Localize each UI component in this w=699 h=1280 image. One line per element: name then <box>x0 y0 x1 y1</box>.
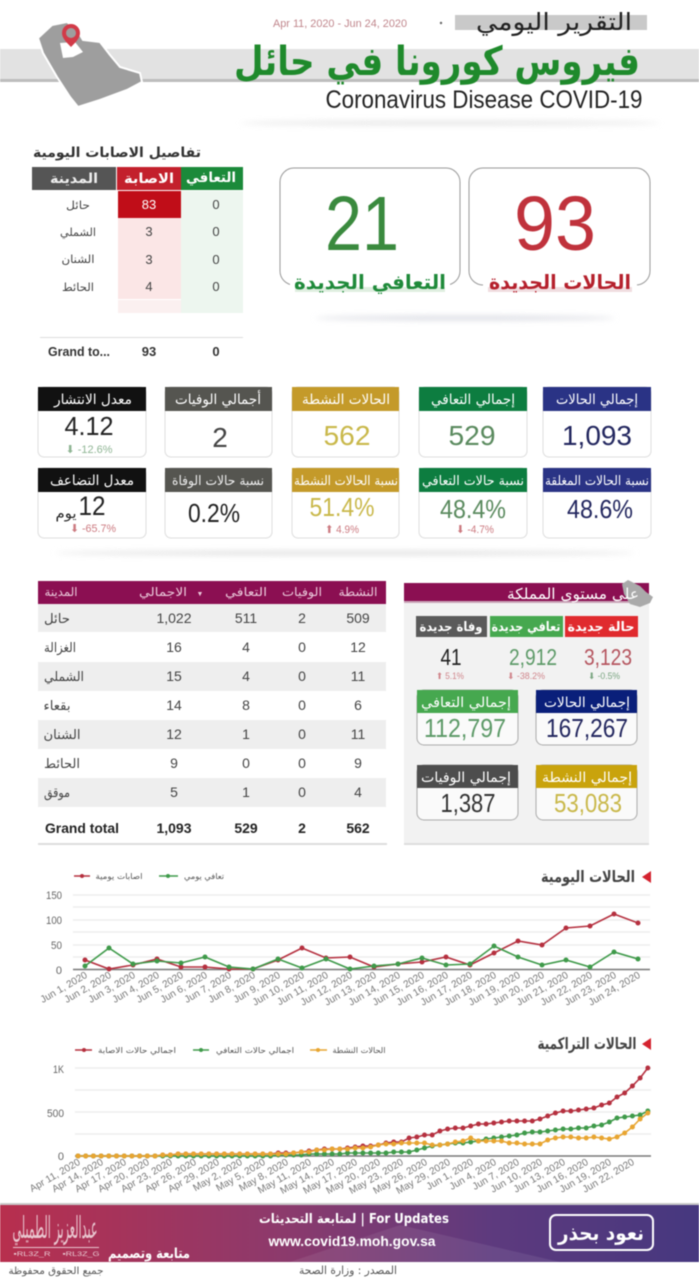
designer signature: متابعة وتصميم <box>108 1246 190 1262</box>
daily chart x axis: Jun 5, 2020 <box>135 970 186 1006</box>
update text: www.covid19.moh.gov.sa <box>268 1233 436 1249</box>
table body: 0 <box>212 197 220 212</box>
panel header: على مستوى المملكة <box>507 585 639 603</box>
daily chart title: الحالات اليومية <box>541 867 635 886</box>
city table header: المدينة <box>44 585 78 599</box>
daily chart x axis: Jun 20, 2020 <box>491 970 547 1009</box>
stat card: spread rate: معدل الانتشار <box>53 392 132 408</box>
table header: التعافي <box>186 170 236 186</box>
stat card: closed cases rate: نسبة الحالات المغلقة <box>545 474 649 489</box>
total active card <box>536 765 637 820</box>
main title: فيروس كورونا في حائل <box>234 39 640 85</box>
city table rows: 4 <box>242 668 250 684</box>
logo: slogan <box>550 1215 653 1250</box>
table body: 83 <box>142 197 156 212</box>
report heading: التقرير اليومي <box>476 8 632 36</box>
stat card: recovery rate <box>419 468 527 538</box>
stat card: closed cases rate <box>543 468 651 538</box>
daily chart x axis <box>39 970 643 1009</box>
new case values <box>436 644 632 681</box>
daily chart x axis: Jun 19, 2020 <box>467 970 523 1009</box>
daily chart legend: تعافي يومي <box>184 872 224 881</box>
table totals: 93 <box>142 344 156 359</box>
new case chips <box>416 616 638 637</box>
table body: الحائط <box>62 281 94 294</box>
cumulative cases line <box>78 1068 648 1156</box>
total active card: إجمالي النشطة <box>542 770 632 786</box>
city table rows: 1 <box>242 726 250 742</box>
city table rows: 4 <box>354 784 362 800</box>
city table rows: حائل <box>44 612 70 627</box>
cumulative chart gridlines <box>75 1068 651 1156</box>
total recovered card: إجمالي التعافي <box>421 695 511 711</box>
daily chart gridlines <box>73 895 650 970</box>
daily chart x axis: Jun 7, 2020 <box>183 970 234 1006</box>
daily chart x axis: Jun 15, 2020 <box>371 970 427 1009</box>
city table rows <box>38 604 386 807</box>
daily details table <box>32 145 243 359</box>
cumulative chart legend: اجمالي حالات الاصابة <box>98 1046 176 1055</box>
card: new recoveries <box>280 168 460 295</box>
stat card: total recovered: إجمالي التعافي <box>431 392 515 408</box>
footer source: المصدر : وزارة الصحة <box>299 1264 397 1277</box>
total recovered card <box>417 690 518 745</box>
total cases card <box>536 690 637 745</box>
cumulative chart x axis: Jun 10, 2020 <box>489 1157 545 1196</box>
cumulative chart x axis: Jun 22, 2020 <box>581 1157 637 1196</box>
city table rows: 511 <box>235 610 257 626</box>
daily chart x axis: Jun 2, 2020 <box>63 970 114 1006</box>
stat card: active <box>292 387 399 457</box>
panel: kingdom level <box>404 580 653 845</box>
stat card: active rate: نسبة الحالات النشطة <box>294 474 398 489</box>
city table rows: 9 <box>170 755 178 771</box>
cumulative chart x axis: May 11, 2020 <box>256 1157 314 1197</box>
cumulative chart x axis: Jun 13, 2020 <box>512 1157 568 1196</box>
cumulative chart x axis: Jun 16, 2020 <box>535 1157 591 1196</box>
table body: الشنان <box>62 253 94 266</box>
city table header: التعافي <box>225 585 267 599</box>
daily chart x axis: Jun 3, 2020 <box>87 970 138 1006</box>
daily chart x axis: Jun 17, 2020 <box>419 970 475 1009</box>
stat card: total deaths <box>165 387 272 457</box>
new case chips: تعافي جديدة <box>492 620 560 635</box>
stat card: doubling rate: يوم <box>56 506 77 522</box>
stat card: active: الحالات النشطة <box>302 392 390 408</box>
daily chart x axis: Jun 16, 2020 <box>395 970 451 1009</box>
cumulative chart title: الحالات التراكمية <box>538 1034 636 1053</box>
header shadow <box>240 121 660 125</box>
cumulative chart y axis: 0 <box>58 1151 64 1163</box>
new case values: 3,123 <box>584 644 632 670</box>
cumulative chart x axis: Apr 20, 2020 <box>96 1157 152 1195</box>
footer banner <box>0 1203 699 1262</box>
designer signature <box>12 1211 190 1262</box>
card: new cases <box>469 168 650 294</box>
daily chart legend: اصابات يومية <box>96 872 142 881</box>
city table total: 2 <box>298 820 306 836</box>
city table rows: 0 <box>298 668 306 684</box>
city table rows: الغزالة <box>44 641 76 656</box>
header band <box>0 49 699 82</box>
daily chart x axis: Jun 6, 2020 <box>159 970 210 1006</box>
stat card: total deaths: 2 <box>212 422 228 453</box>
table totals: 0 <box>212 344 220 359</box>
city table rows: 6 <box>354 697 362 713</box>
designer signature: عبدالعزيز الطميلي <box>12 1211 98 1246</box>
stat card: active rate <box>292 468 399 538</box>
logo: slogan: نعود بحذر <box>557 1221 644 1245</box>
stat card: closed cases rate: 48.6% <box>567 494 633 524</box>
cumulative chart legend: اجمالي حالات التعافي <box>216 1046 294 1055</box>
cumulative chart x axis: May 5, 2020 <box>214 1157 268 1194</box>
daily chart y axis: 0 <box>56 965 62 977</box>
daily chart x axis: Jun 14, 2020 <box>347 970 403 1009</box>
city table rows: 8 <box>242 697 250 713</box>
stat card: active rate: 51.4% <box>310 492 374 522</box>
daily chart x axis: Jun 4, 2020 <box>111 970 162 1006</box>
cumulative chart legend <box>75 1046 386 1055</box>
subtitle: Coronavirus Disease COVID-19 <box>326 86 642 114</box>
stat card: active rate: ⬆ 4.9% <box>325 524 359 536</box>
stat card: recovery rate: 48.4% <box>440 494 506 524</box>
stat card: total recovered: 529 <box>448 420 496 451</box>
stat card: total cases: 1,093 <box>562 420 632 451</box>
city table rows: 0 <box>298 784 306 800</box>
total deaths card <box>417 765 518 820</box>
city table total: 1,093 <box>156 820 192 836</box>
city table rows: 12 <box>166 726 182 742</box>
card: new cases: الحالات الجديدة <box>489 270 631 294</box>
date range: Apr 11, 2020 - Jun 24, 2020 <box>273 18 407 30</box>
city table rows: 15 <box>166 668 182 684</box>
daily chart x axis: Jun 18, 2020 <box>443 970 499 1009</box>
update text: For Updates | لمتابعة التحديثات <box>259 1212 449 1227</box>
daily recovery line <box>85 946 638 969</box>
stat card: doubling rate: معدل التضاعف <box>50 473 134 489</box>
stat card: total cases <box>543 387 651 457</box>
city table rows: 9 <box>354 755 362 771</box>
daily chart x axis: Jun 12, 2020 <box>299 970 355 1009</box>
cumulative chart x axis: May 14, 2020 <box>279 1157 337 1197</box>
cumulative chart x axis: Apr 11, 2020 <box>28 1157 83 1195</box>
new case chips: وفاة جديدة <box>420 620 482 635</box>
total active card: 53,083 <box>554 788 622 818</box>
total deaths card: 1,387 <box>440 788 496 818</box>
total deaths card: إجمالي الوفيات <box>421 770 511 786</box>
city table rows: الحائط <box>44 757 80 772</box>
daily chart x axis: Jun 23, 2020 <box>563 970 619 1009</box>
cumulative chart x axis: Jun 1, 2020 <box>425 1157 476 1193</box>
active cases line <box>78 1113 648 1156</box>
city table rows: 0 <box>298 639 306 655</box>
table header: المدينة <box>50 171 98 187</box>
table body: 4 <box>145 279 153 294</box>
cumulative chart x axis <box>28 1157 637 1197</box>
cumulative chart x axis: Apr 29, 2020 <box>166 1157 222 1195</box>
city table rows: 4 <box>242 639 250 655</box>
stat card: doubling rate <box>38 468 146 538</box>
city table total: Grand total <box>45 820 119 836</box>
daily chart x axis: Jun 11, 2020 <box>276 970 331 1008</box>
table totals <box>40 337 243 359</box>
stat card: total recovered <box>419 387 527 457</box>
designer signature: ▪RL3Z_G <box>62 1251 100 1258</box>
chart: cumulative cases <box>28 1034 651 1197</box>
daily chart y axis <box>46 890 62 977</box>
city table total <box>45 820 370 836</box>
table body: 0 <box>212 252 220 267</box>
city table header <box>38 581 386 604</box>
city table rows: 14 <box>166 697 182 713</box>
city table rows: 12 <box>350 639 366 655</box>
stat card: spread rate: ⬇ -12.6% <box>66 444 113 456</box>
stat card: death rate <box>165 468 272 538</box>
cumulative chart x axis: Jun 4, 2020 <box>448 1157 499 1193</box>
daily infections line <box>85 914 638 969</box>
city table header: النشطة <box>338 585 378 599</box>
stat card: spread rate <box>38 387 146 457</box>
stat card: spread rate: 4.12 <box>64 411 114 441</box>
city table total: 529 <box>234 820 258 836</box>
daily chart x axis: Jun 13, 2020 <box>323 970 379 1009</box>
stat card: recovery rate: ⬇ -4.7% <box>456 524 494 536</box>
new case chips: حالة جديدة <box>568 620 634 635</box>
city table rows: بقعاء <box>44 699 70 714</box>
stat card: doubling rate: 12 <box>78 491 106 521</box>
city table rows: 1 <box>242 784 250 800</box>
table header <box>32 167 243 190</box>
cumulative chart x axis: May 8, 2020 <box>237 1157 291 1194</box>
table body: الشملي <box>60 226 96 239</box>
table body: حائل <box>66 199 90 212</box>
city table rows: 0 <box>242 755 250 771</box>
city table <box>38 581 387 845</box>
city table rows: الشملي <box>44 670 84 685</box>
city table header: ▼ <box>197 591 203 598</box>
stat card: total cases: إجمالي الحالات <box>556 392 638 408</box>
table body <box>60 191 243 313</box>
new case values: ⬇ -38.2% <box>507 671 545 681</box>
city table rows: موقق <box>44 786 70 801</box>
table totals: Grand to... <box>48 344 110 359</box>
city table rows: 0 <box>298 726 306 742</box>
city table rows: 0 <box>298 755 306 771</box>
new case values: ⬆ 5.1% <box>436 671 464 681</box>
table body: 3 <box>145 252 153 267</box>
cumulative chart y axis: 1K <box>53 1064 65 1076</box>
new case values: 2,912 <box>509 644 557 670</box>
daily chart y axis: 50 <box>51 940 62 952</box>
stat card: recovery rate: نسبة حالات التعافي <box>422 474 524 489</box>
cumulative recovery line <box>78 1111 648 1156</box>
stat card: total deaths: أجمالي الوفيات <box>175 390 261 408</box>
table body: 0 <box>212 279 220 294</box>
cumulative chart y axis <box>47 1064 65 1163</box>
cumulative chart x axis: Jun 7, 2020 <box>471 1157 522 1193</box>
total recovered card: 112,797 <box>424 713 506 743</box>
new case values: ⬇ -0.5% <box>588 671 620 681</box>
cumulative chart x axis: May 20, 2020 <box>325 1157 383 1197</box>
cumulative chart x axis: Apr 26, 2020 <box>143 1157 199 1195</box>
map: Saudi Arabia with Hail marker <box>38 22 142 107</box>
cumulative chart x axis: Jun 19, 2020 <box>558 1157 614 1196</box>
cumulative chart x axis: May 17, 2020 <box>302 1157 360 1197</box>
update text <box>259 1212 449 1249</box>
city table rows: 16 <box>166 639 182 655</box>
cards shadow <box>315 316 615 320</box>
daily chart y axis: 150 <box>46 890 62 902</box>
stats shadow <box>55 551 635 555</box>
stat card: active: 562 <box>324 420 370 451</box>
city table rows: 0 <box>298 697 306 713</box>
daily chart x axis: Jun 1, 2020 <box>39 970 90 1006</box>
chart: daily cases <box>39 867 651 1009</box>
city table rows: 2 <box>298 610 306 626</box>
card: new recoveries: التعافي الجديدة <box>294 270 446 295</box>
cumulative chart x axis: May 23, 2020 <box>348 1157 406 1197</box>
footer rights: جميع الحقوق محفوظة <box>8 1266 104 1277</box>
daily chart legend <box>74 872 224 881</box>
table title: تفاصيل الاصابات اليومية <box>33 145 201 161</box>
city table header: الاجمالي <box>139 585 187 599</box>
cumulative chart x axis: Apr 23, 2020 <box>119 1157 175 1195</box>
daily chart x axis: Jun 10, 2020 <box>251 970 307 1009</box>
city table rows: 509 <box>346 610 370 626</box>
cumulative chart x axis: Apr 17, 2020 <box>73 1157 129 1195</box>
card: new cases: 93 <box>514 181 596 267</box>
cumulative chart x axis: May 2, 2020 <box>191 1157 245 1194</box>
city table rows: 11 <box>351 668 365 684</box>
daily chart x axis: Jun 9, 2020 <box>232 970 283 1006</box>
cumulative chart x axis: May 29, 2020 <box>395 1157 453 1197</box>
city table header: الوفيات <box>282 585 322 600</box>
cumulative chart x axis: Apr 14, 2020 <box>50 1157 106 1195</box>
cumulative chart y axis: 500 <box>47 1108 64 1120</box>
daily chart y axis: 100 <box>46 915 62 927</box>
new case values: 41 <box>440 644 462 670</box>
city table rows: 5 <box>170 784 178 800</box>
daily chart x axis: Jun 24, 2020 <box>587 970 643 1009</box>
city table total: 562 <box>346 820 370 836</box>
stat card: death rate: 0.2% <box>188 498 240 528</box>
cumulative chart legend: الحالات النشطة <box>332 1046 386 1055</box>
city table rows: 1,022 <box>156 610 192 626</box>
cumulative chart x axis: May 26, 2020 <box>372 1157 430 1197</box>
stat card: doubling rate: ⬇ -65.7% <box>70 523 116 535</box>
daily chart x axis: Jun 21, 2020 <box>515 970 571 1009</box>
total cases card: إجمالي الحالات <box>544 695 630 711</box>
daily chart x axis: Jun 22, 2020 <box>539 970 595 1009</box>
city table rows: 11 <box>351 726 365 742</box>
table header: الاصابة <box>124 171 174 187</box>
card: new recoveries: 21 <box>325 181 399 267</box>
table body: 3 <box>145 224 153 239</box>
table body: 0 <box>212 224 220 239</box>
total cases card: 167,267 <box>546 713 628 743</box>
panel header <box>404 580 653 607</box>
daily chart x axis: Jun 8, 2020 <box>207 970 258 1006</box>
city table rows: الشنان <box>44 728 80 743</box>
stat card: death rate: نسبة حالات الوفاة <box>172 474 264 489</box>
designer signature: ▪RL3Z_R <box>14 1251 51 1258</box>
